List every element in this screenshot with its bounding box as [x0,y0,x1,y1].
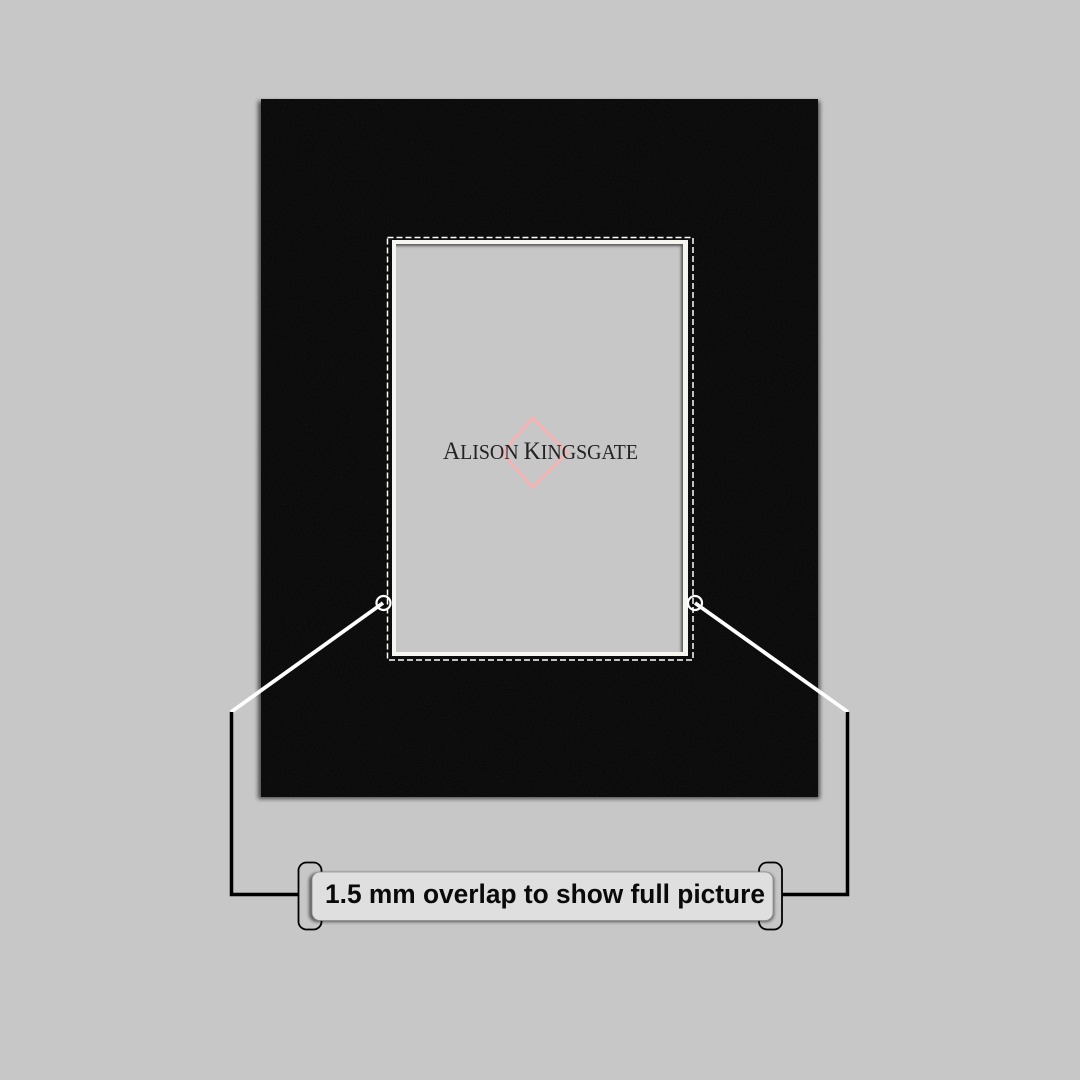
diagram [230,98,850,930]
dashed overlap outline [388,238,693,660]
right bracket [759,862,782,930]
mat board shadow [258,101,820,799]
white bevel frame and opening [380,240,688,656]
logo diamond [502,418,567,488]
right callout pointer [688,596,848,712]
label box [312,872,773,920]
logo [443,418,638,488]
left bracket [298,862,322,930]
label text: 1.5 mm overlap to show full picture [325,879,765,909]
left leader line [232,712,298,894]
label shadow [309,873,774,922]
logo wordmark: ALISON KINGSGATE [443,438,638,465]
black mat board [261,99,818,797]
right leader line [782,712,848,894]
left callout pointer [231,596,390,712]
